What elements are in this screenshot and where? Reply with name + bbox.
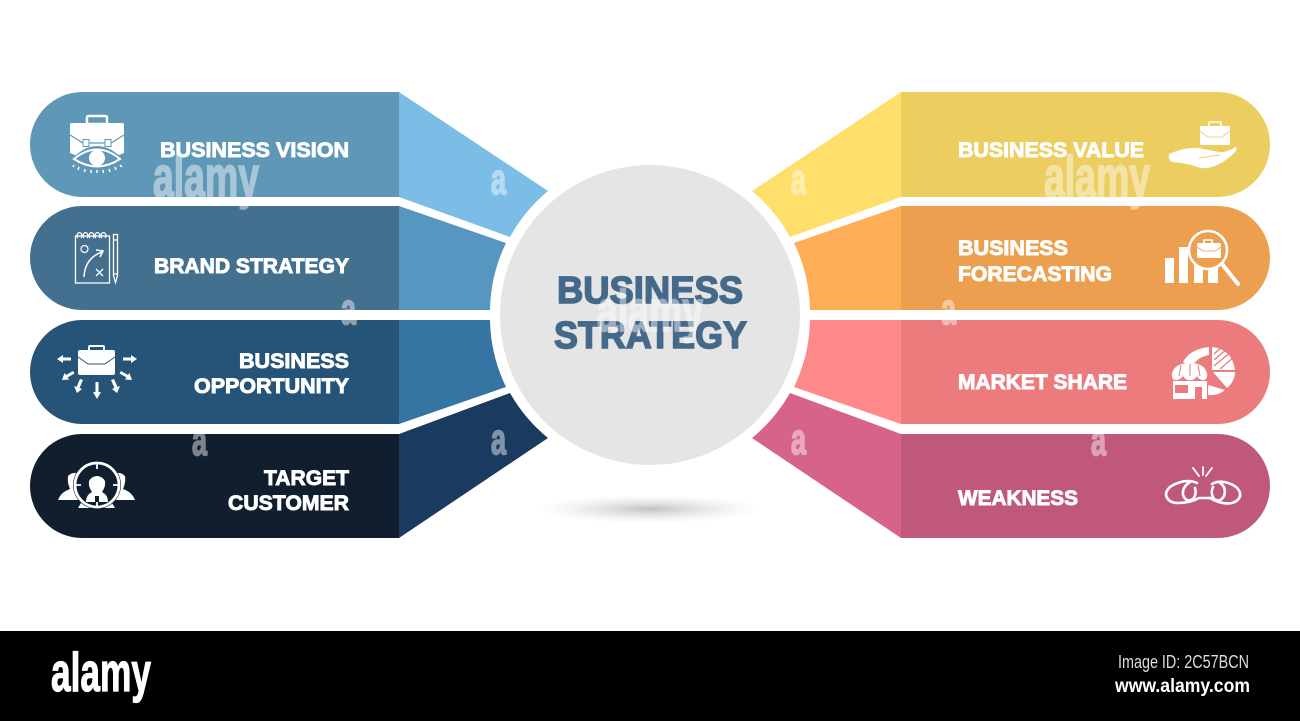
icon: shop with pie chart: [1172, 347, 1235, 399]
panel: business value: [752, 92, 1270, 237]
icon: briefcase with eye: [70, 116, 124, 173]
watermarks: a: [341, 285, 356, 334]
footer logo: alamy: [51, 641, 151, 703]
watermarks: alamy: [153, 145, 259, 210]
watermarks: a: [491, 415, 506, 464]
band: [30, 434, 399, 538]
panel: business vision: [30, 92, 548, 237]
panel: weakness: [752, 393, 1270, 538]
wedge: [399, 393, 548, 538]
watermarks: a: [491, 155, 506, 204]
label line 2: OPPORTUNITY: [194, 375, 349, 398]
wedge: [399, 320, 506, 424]
shadow under circle: [538, 495, 762, 523]
band: [30, 206, 399, 310]
label: WEAKNESS: [958, 487, 1078, 510]
watermarks: a: [941, 285, 956, 334]
watermarks: a: [1091, 416, 1106, 465]
footer bar: [0, 631, 1300, 721]
panel: business forecasting: [794, 206, 1270, 310]
wedge: [752, 92, 901, 237]
label line 2: FORECASTING: [958, 263, 1112, 286]
central circle: [500, 165, 800, 523]
band: [901, 434, 1270, 538]
watermarks: a: [791, 415, 806, 464]
icon: broken chain: [1166, 467, 1240, 503]
panel: brand strategy: [30, 206, 506, 310]
watermarks: alamy: [597, 279, 703, 344]
heading: BUSINESS: [557, 270, 743, 312]
label: BUSINESS VISION: [160, 139, 349, 162]
label line 2: CUSTOMER: [228, 492, 349, 515]
icon: bars with magnifier: [1165, 231, 1238, 284]
band: [901, 206, 1270, 310]
wedge: [794, 320, 901, 424]
band: [30, 92, 399, 197]
panel: target customer: [30, 393, 548, 538]
label: BUSINESS VALUE: [958, 139, 1144, 162]
heading: STRATEGY: [554, 315, 747, 357]
watermarks: a: [791, 155, 806, 204]
wedge: [794, 206, 901, 310]
panel: business opportunity: [30, 320, 506, 424]
circle: [500, 165, 800, 465]
panel: market share: [794, 320, 1270, 424]
wedge: [752, 393, 901, 538]
icon: target on customer: [58, 461, 135, 509]
label: MARKET SHARE: [958, 371, 1127, 394]
band: [901, 92, 1270, 197]
website: www.alamy.com: [1114, 676, 1250, 697]
image id: Image ID: 2C57BCN: [1118, 652, 1249, 672]
wedge: [399, 206, 506, 310]
watermarks: a: [192, 416, 207, 465]
icon: briefcase with arrows: [57, 346, 137, 399]
band: [30, 320, 399, 424]
label line 1: BUSINESS: [958, 237, 1068, 260]
heading: [554, 270, 747, 357]
label line 1: TARGET: [264, 467, 349, 490]
icon: hand holding briefcase: [1169, 122, 1236, 168]
watermarks: alamy: [1044, 145, 1150, 210]
label: BRAND STRATEGY: [154, 255, 349, 278]
watermarks: [153, 145, 1150, 465]
band: [901, 320, 1270, 424]
icon: strategy notebook and pencil: [76, 233, 118, 283]
label line 1: BUSINESS: [239, 350, 349, 373]
wedge: [399, 92, 548, 237]
